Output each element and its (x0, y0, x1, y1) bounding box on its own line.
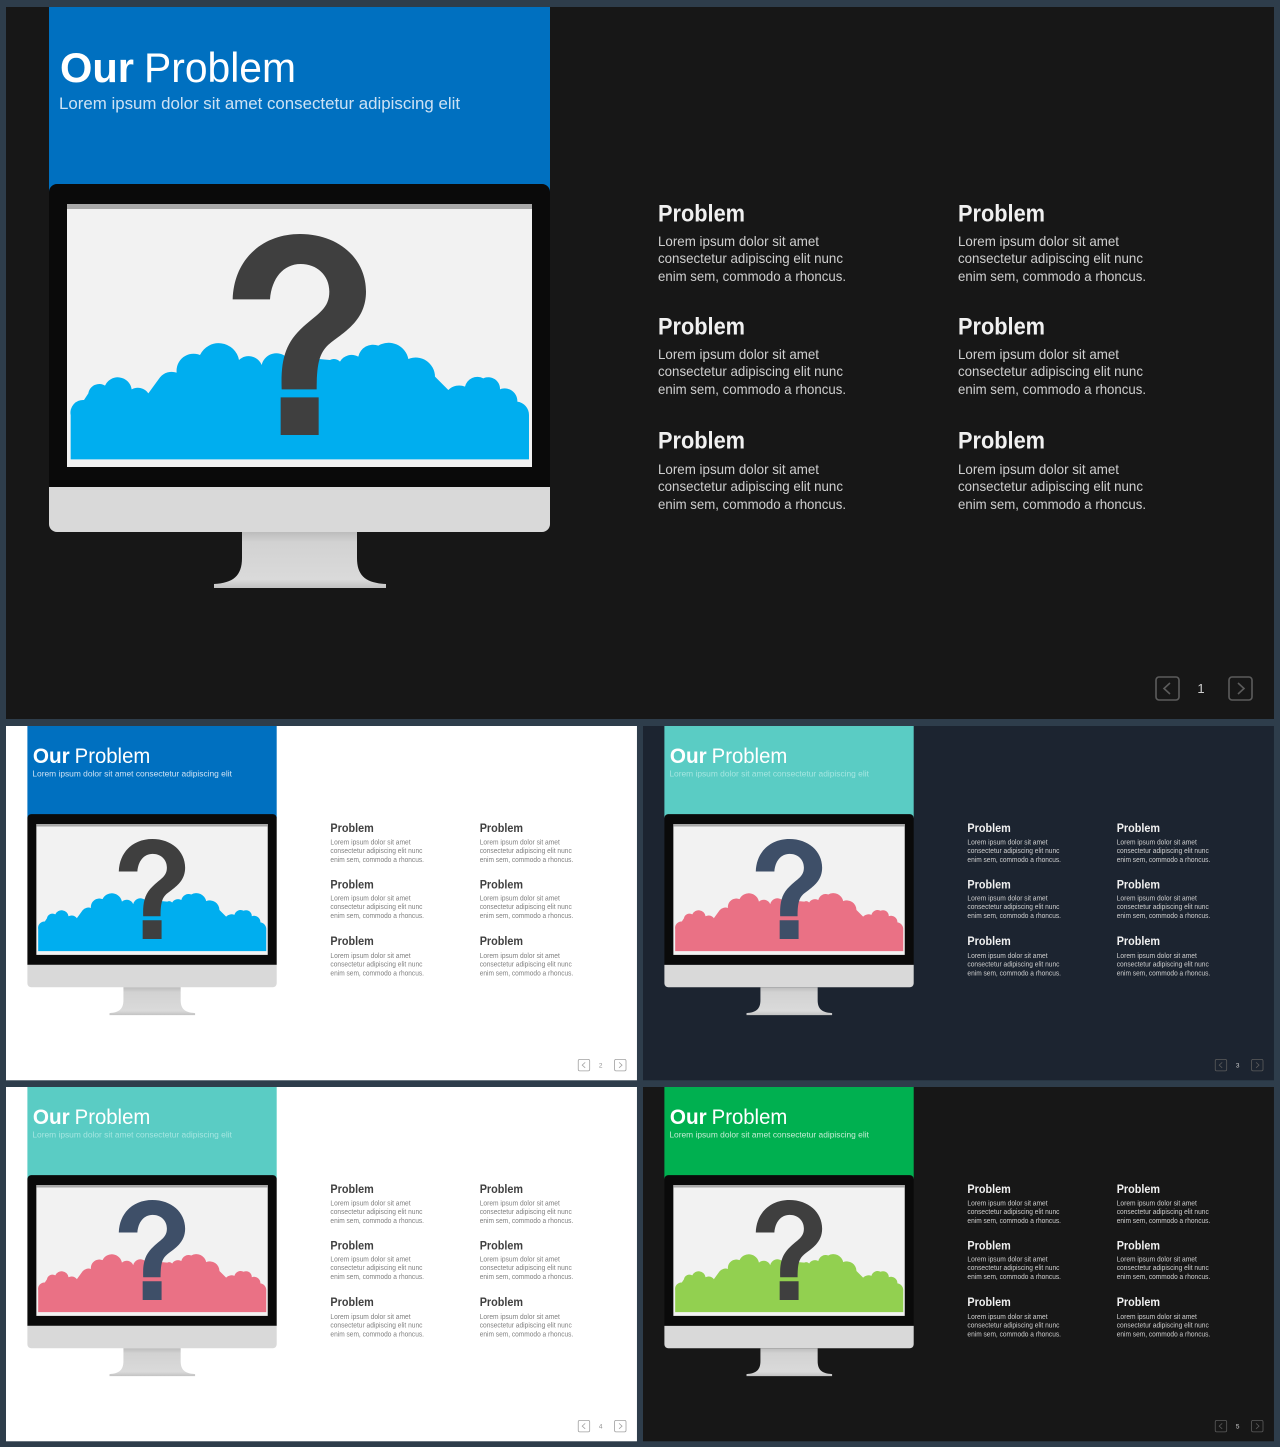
slide 3: navy teal (643, 726, 1274, 1080)
problem 3: consectetur adipiscing elit nunc (967, 1265, 1060, 1272)
problem 2: Lorem ipsum dolor sit amet (1117, 1200, 1197, 1207)
problem 1 (967, 1182, 1061, 1225)
problem 5 (330, 1295, 424, 1338)
problem 6 (1117, 1295, 1210, 1338)
problem 3: enim sem, commodo a rhoncus. (330, 913, 424, 920)
problem 2: consectetur adipiscing elit nunc (1117, 848, 1209, 855)
monitor illustration (49, 184, 550, 588)
problem 4: Lorem ipsum dolor sit amet (958, 346, 1119, 362)
problem 1: consectetur adipiscing elit nunc (658, 250, 843, 266)
problem 4: consectetur adipiscing elit nunc (1117, 904, 1209, 911)
problem 6: consectetur adipiscing elit nunc (480, 961, 572, 968)
problem 2: enim sem, commodo a rhoncus. (1117, 857, 1210, 864)
problem 4: enim sem, commodo a rhoncus. (1117, 913, 1210, 920)
problem 2 (480, 821, 573, 864)
problem 3: consectetur adipiscing elit nunc (967, 904, 1060, 911)
problem 2: Lorem ipsum dolor sit amet (1117, 839, 1197, 846)
problem 1: Problem (967, 1182, 1011, 1196)
problem 4: Problem (480, 877, 523, 891)
problem 5 (658, 427, 846, 512)
problem 5: Problem (658, 427, 745, 454)
problem 1: Lorem ipsum dolor sit amet (330, 1200, 411, 1207)
title panel (664, 726, 914, 818)
problem 3: Problem (658, 313, 745, 340)
slide background (6, 1087, 637, 1441)
problem 2: Problem (1117, 1182, 1160, 1196)
problem 1: Problem (330, 821, 374, 835)
problem 2: enim sem, commodo a rhoncus. (480, 1218, 573, 1225)
problem 6: consectetur adipiscing elit nunc (480, 1322, 572, 1329)
problem 6: Lorem ipsum dolor sit amet (958, 461, 1119, 477)
problem 1: enim sem, commodo a rhoncus. (658, 268, 846, 284)
problem 3 (967, 877, 1061, 920)
problem 5 (967, 1295, 1061, 1338)
problem 6: enim sem, commodo a rhoncus. (480, 1331, 573, 1338)
problem 1: enim sem, commodo a rhoncus. (330, 857, 424, 864)
icon: question mark (119, 1200, 185, 1300)
problem 1: Lorem ipsum dolor sit amet (967, 1200, 1048, 1207)
problem 3: Problem (967, 1238, 1011, 1252)
slide background (643, 1087, 1274, 1441)
title panel (49, 7, 550, 192)
problem 4: consectetur adipiscing elit nunc (1117, 1265, 1209, 1272)
pagination (578, 1059, 626, 1071)
pagination: 4 (599, 1423, 603, 1430)
problem 6: Problem (480, 934, 523, 948)
problem 5: enim sem, commodo a rhoncus. (967, 970, 1061, 977)
problem 4: enim sem, commodo a rhoncus. (480, 1274, 573, 1281)
problem 3: Lorem ipsum dolor sit amet (330, 1257, 411, 1264)
problem 1: Lorem ipsum dolor sit amet (330, 839, 411, 846)
problem 3 (330, 1238, 424, 1281)
problem 5: Lorem ipsum dolor sit amet (967, 1314, 1048, 1321)
problem 6: Lorem ipsum dolor sit amet (480, 1314, 560, 1321)
problem 5: Lorem ipsum dolor sit amet (330, 953, 411, 960)
title: Problem (712, 745, 787, 768)
problem 4 (958, 313, 1146, 397)
problem 6: enim sem, commodo a rhoncus. (1117, 970, 1210, 977)
problem 4 (1117, 1238, 1210, 1281)
problem 4: Lorem ipsum dolor sit amet (1117, 896, 1197, 903)
title panel (664, 1087, 914, 1179)
problem 6 (480, 1295, 573, 1338)
problem 4: consectetur adipiscing elit nunc (480, 904, 572, 911)
problem 1: consectetur adipiscing elit nunc (967, 1209, 1060, 1216)
monitor illustration (27, 814, 277, 1015)
problem 2: Problem (958, 200, 1045, 227)
problem 3: Lorem ipsum dolor sit amet (967, 896, 1048, 903)
problem 2: enim sem, commodo a rhoncus. (1117, 1218, 1210, 1225)
problem 2 (480, 1182, 573, 1225)
problem 6: Lorem ipsum dolor sit amet (480, 953, 560, 960)
problem 4 (480, 1238, 573, 1281)
problem 1: Lorem ipsum dolor sit amet (658, 233, 819, 249)
problem 4: enim sem, commodo a rhoncus. (1117, 1274, 1210, 1281)
problem 2: consectetur adipiscing elit nunc (958, 250, 1143, 266)
problem 6 (480, 934, 573, 977)
problem 6: Lorem ipsum dolor sit amet (1117, 1314, 1197, 1321)
slide 2: white blue (6, 726, 637, 1080)
problem 5: enim sem, commodo a rhoncus. (658, 496, 846, 512)
icon: question mark (119, 839, 185, 939)
slide background (6, 726, 637, 1080)
title: Our (670, 1106, 707, 1129)
problem 5: Problem (967, 934, 1011, 948)
problem 6: enim sem, commodo a rhoncus. (958, 496, 1146, 512)
title: Our (60, 44, 134, 91)
title: Problem (144, 44, 296, 91)
problem 3 (330, 877, 424, 920)
icon: question mark (233, 234, 366, 435)
problem 5: enim sem, commodo a rhoncus. (330, 970, 424, 977)
problem 6: Lorem ipsum dolor sit amet (1117, 953, 1197, 960)
pagination: 2 (599, 1062, 603, 1069)
problem 1 (330, 1182, 424, 1225)
problem 6: enim sem, commodo a rhoncus. (480, 970, 573, 977)
problem 3: Lorem ipsum dolor sit amet (330, 896, 411, 903)
problem 1: enim sem, commodo a rhoncus. (330, 1218, 424, 1225)
pagination (1156, 677, 1252, 700)
slide background (643, 726, 1274, 1080)
problem 2: enim sem, commodo a rhoncus. (480, 857, 573, 864)
problem 4: Problem (1117, 1238, 1160, 1252)
slide 4: white teal (6, 1087, 637, 1441)
problem 3: enim sem, commodo a rhoncus. (967, 1274, 1061, 1281)
problem 1: Lorem ipsum dolor sit amet (967, 839, 1048, 846)
problem 2: Lorem ipsum dolor sit amet (958, 233, 1119, 249)
problem 4: enim sem, commodo a rhoncus. (480, 913, 573, 920)
problem 3: enim sem, commodo a rhoncus. (658, 381, 846, 397)
problem 2: Problem (480, 1182, 523, 1196)
problem 6: Problem (480, 1295, 523, 1309)
problem 1: consectetur adipiscing elit nunc (967, 848, 1060, 855)
problem 1: enim sem, commodo a rhoncus. (967, 1218, 1061, 1225)
problem 3: Lorem ipsum dolor sit amet (967, 1257, 1048, 1264)
problem 1: consectetur adipiscing elit nunc (330, 848, 423, 855)
problem 6: Problem (1117, 1295, 1160, 1309)
problem 4 (1117, 877, 1210, 920)
problem 5 (330, 934, 424, 977)
slide background (6, 7, 1274, 719)
title: Problem (75, 745, 150, 768)
problem 3: enim sem, commodo a rhoncus. (330, 1274, 424, 1281)
problem 1 (330, 821, 424, 864)
problem 2 (1117, 1182, 1210, 1225)
problem 5: consectetur adipiscing elit nunc (658, 478, 843, 494)
problem 3: Problem (330, 1238, 374, 1252)
problem 6: enim sem, commodo a rhoncus. (1117, 1331, 1210, 1338)
problem 6: consectetur adipiscing elit nunc (1117, 961, 1209, 968)
subtitle: Lorem ipsum dolor sit amet consectetur adipiscing elit (32, 1129, 233, 1139)
problem 2 (958, 200, 1146, 284)
problem 3: Problem (967, 877, 1011, 891)
pagination: 1 (1197, 681, 1205, 696)
problem 2: consectetur adipiscing elit nunc (1117, 1209, 1209, 1216)
pagination: 5 (1236, 1423, 1240, 1430)
icon: question mark (756, 1200, 822, 1300)
problem 1 (967, 821, 1061, 864)
problem 3: consectetur adipiscing elit nunc (658, 363, 843, 379)
problem 4: Problem (480, 1238, 523, 1252)
problem 2: Lorem ipsum dolor sit amet (480, 1200, 560, 1207)
problem 5: consectetur adipiscing elit nunc (330, 961, 423, 968)
problem 6 (1117, 934, 1210, 977)
problem 3: enim sem, commodo a rhoncus. (967, 913, 1061, 920)
problem 1: consectetur adipiscing elit nunc (330, 1209, 423, 1216)
problem 2: Problem (1117, 821, 1160, 835)
problem 6 (958, 427, 1146, 512)
problem 4: Problem (1117, 877, 1160, 891)
problem 1: Problem (330, 1182, 374, 1196)
problem 4: consectetur adipiscing elit nunc (958, 363, 1143, 379)
problem 3: consectetur adipiscing elit nunc (330, 904, 423, 911)
problem 1 (658, 200, 846, 284)
problem 2: enim sem, commodo a rhoncus. (958, 268, 1146, 284)
problem 4: Problem (958, 313, 1045, 340)
problem 5: enim sem, commodo a rhoncus. (330, 1331, 424, 1338)
problem 3 (658, 313, 846, 397)
problem 5: Problem (967, 1295, 1011, 1309)
problem 4: consectetur adipiscing elit nunc (480, 1265, 572, 1272)
problem 4: enim sem, commodo a rhoncus. (958, 381, 1146, 397)
title panel (27, 726, 277, 818)
title: Problem (712, 1106, 787, 1129)
problem 3 (967, 1238, 1061, 1281)
problem 4: Lorem ipsum dolor sit amet (480, 896, 560, 903)
problem 5: Problem (330, 1295, 374, 1309)
monitor illustration (664, 814, 914, 1015)
problem 5: Lorem ipsum dolor sit amet (658, 461, 819, 477)
title panel (27, 1087, 277, 1179)
slide 5: dark green (643, 1087, 1274, 1441)
subtitle: Lorem ipsum dolor sit amet consectetur adipiscing elit (669, 768, 870, 778)
slide 1: large dark blue (6, 7, 1274, 719)
problem 6: consectetur adipiscing elit nunc (958, 478, 1143, 494)
problem 5: enim sem, commodo a rhoncus. (967, 1331, 1061, 1338)
problem 5: Lorem ipsum dolor sit amet (967, 953, 1048, 960)
problem 4: Lorem ipsum dolor sit amet (1117, 1257, 1197, 1264)
monitor illustration (27, 1175, 277, 1376)
title: Our (670, 745, 707, 768)
problem 6: Problem (958, 427, 1045, 454)
problem 3: consectetur adipiscing elit nunc (330, 1265, 423, 1272)
pagination: 3 (1236, 1062, 1240, 1069)
subtitle: Lorem ipsum dolor sit amet consectetur adipiscing elit (59, 94, 460, 113)
problem 2 (1117, 821, 1210, 864)
problem 5: Problem (330, 934, 374, 948)
problem 6: consectetur adipiscing elit nunc (1117, 1322, 1209, 1329)
title: Problem (75, 1106, 150, 1129)
problem 2: consectetur adipiscing elit nunc (480, 1209, 572, 1216)
problem 5: consectetur adipiscing elit nunc (967, 961, 1060, 968)
problem 6: Problem (1117, 934, 1160, 948)
problem 2: Problem (480, 821, 523, 835)
subtitle: Lorem ipsum dolor sit amet consectetur adipiscing elit (32, 768, 233, 778)
problem 5: Lorem ipsum dolor sit amet (330, 1314, 411, 1321)
title: Our (33, 1106, 70, 1129)
problem 5 (967, 934, 1061, 977)
title: Our (33, 745, 70, 768)
pagination (1215, 1420, 1263, 1432)
problem 3: Lorem ipsum dolor sit amet (658, 346, 819, 362)
icon: question mark (756, 839, 822, 939)
problem 1: Problem (658, 200, 745, 227)
subtitle: Lorem ipsum dolor sit amet consectetur adipiscing elit (669, 1129, 870, 1139)
pagination (578, 1420, 626, 1432)
problem 1: Problem (967, 821, 1011, 835)
problem 5: consectetur adipiscing elit nunc (967, 1322, 1060, 1329)
problem 4: Lorem ipsum dolor sit amet (480, 1257, 560, 1264)
problem 2: consectetur adipiscing elit nunc (480, 848, 572, 855)
problem 1: enim sem, commodo a rhoncus. (967, 857, 1061, 864)
pagination (1215, 1059, 1263, 1071)
problem 3: Problem (330, 877, 374, 891)
monitor illustration (664, 1175, 914, 1376)
problem 4 (480, 877, 573, 920)
problem 5: consectetur adipiscing elit nunc (330, 1322, 423, 1329)
problem 2: Lorem ipsum dolor sit amet (480, 839, 560, 846)
